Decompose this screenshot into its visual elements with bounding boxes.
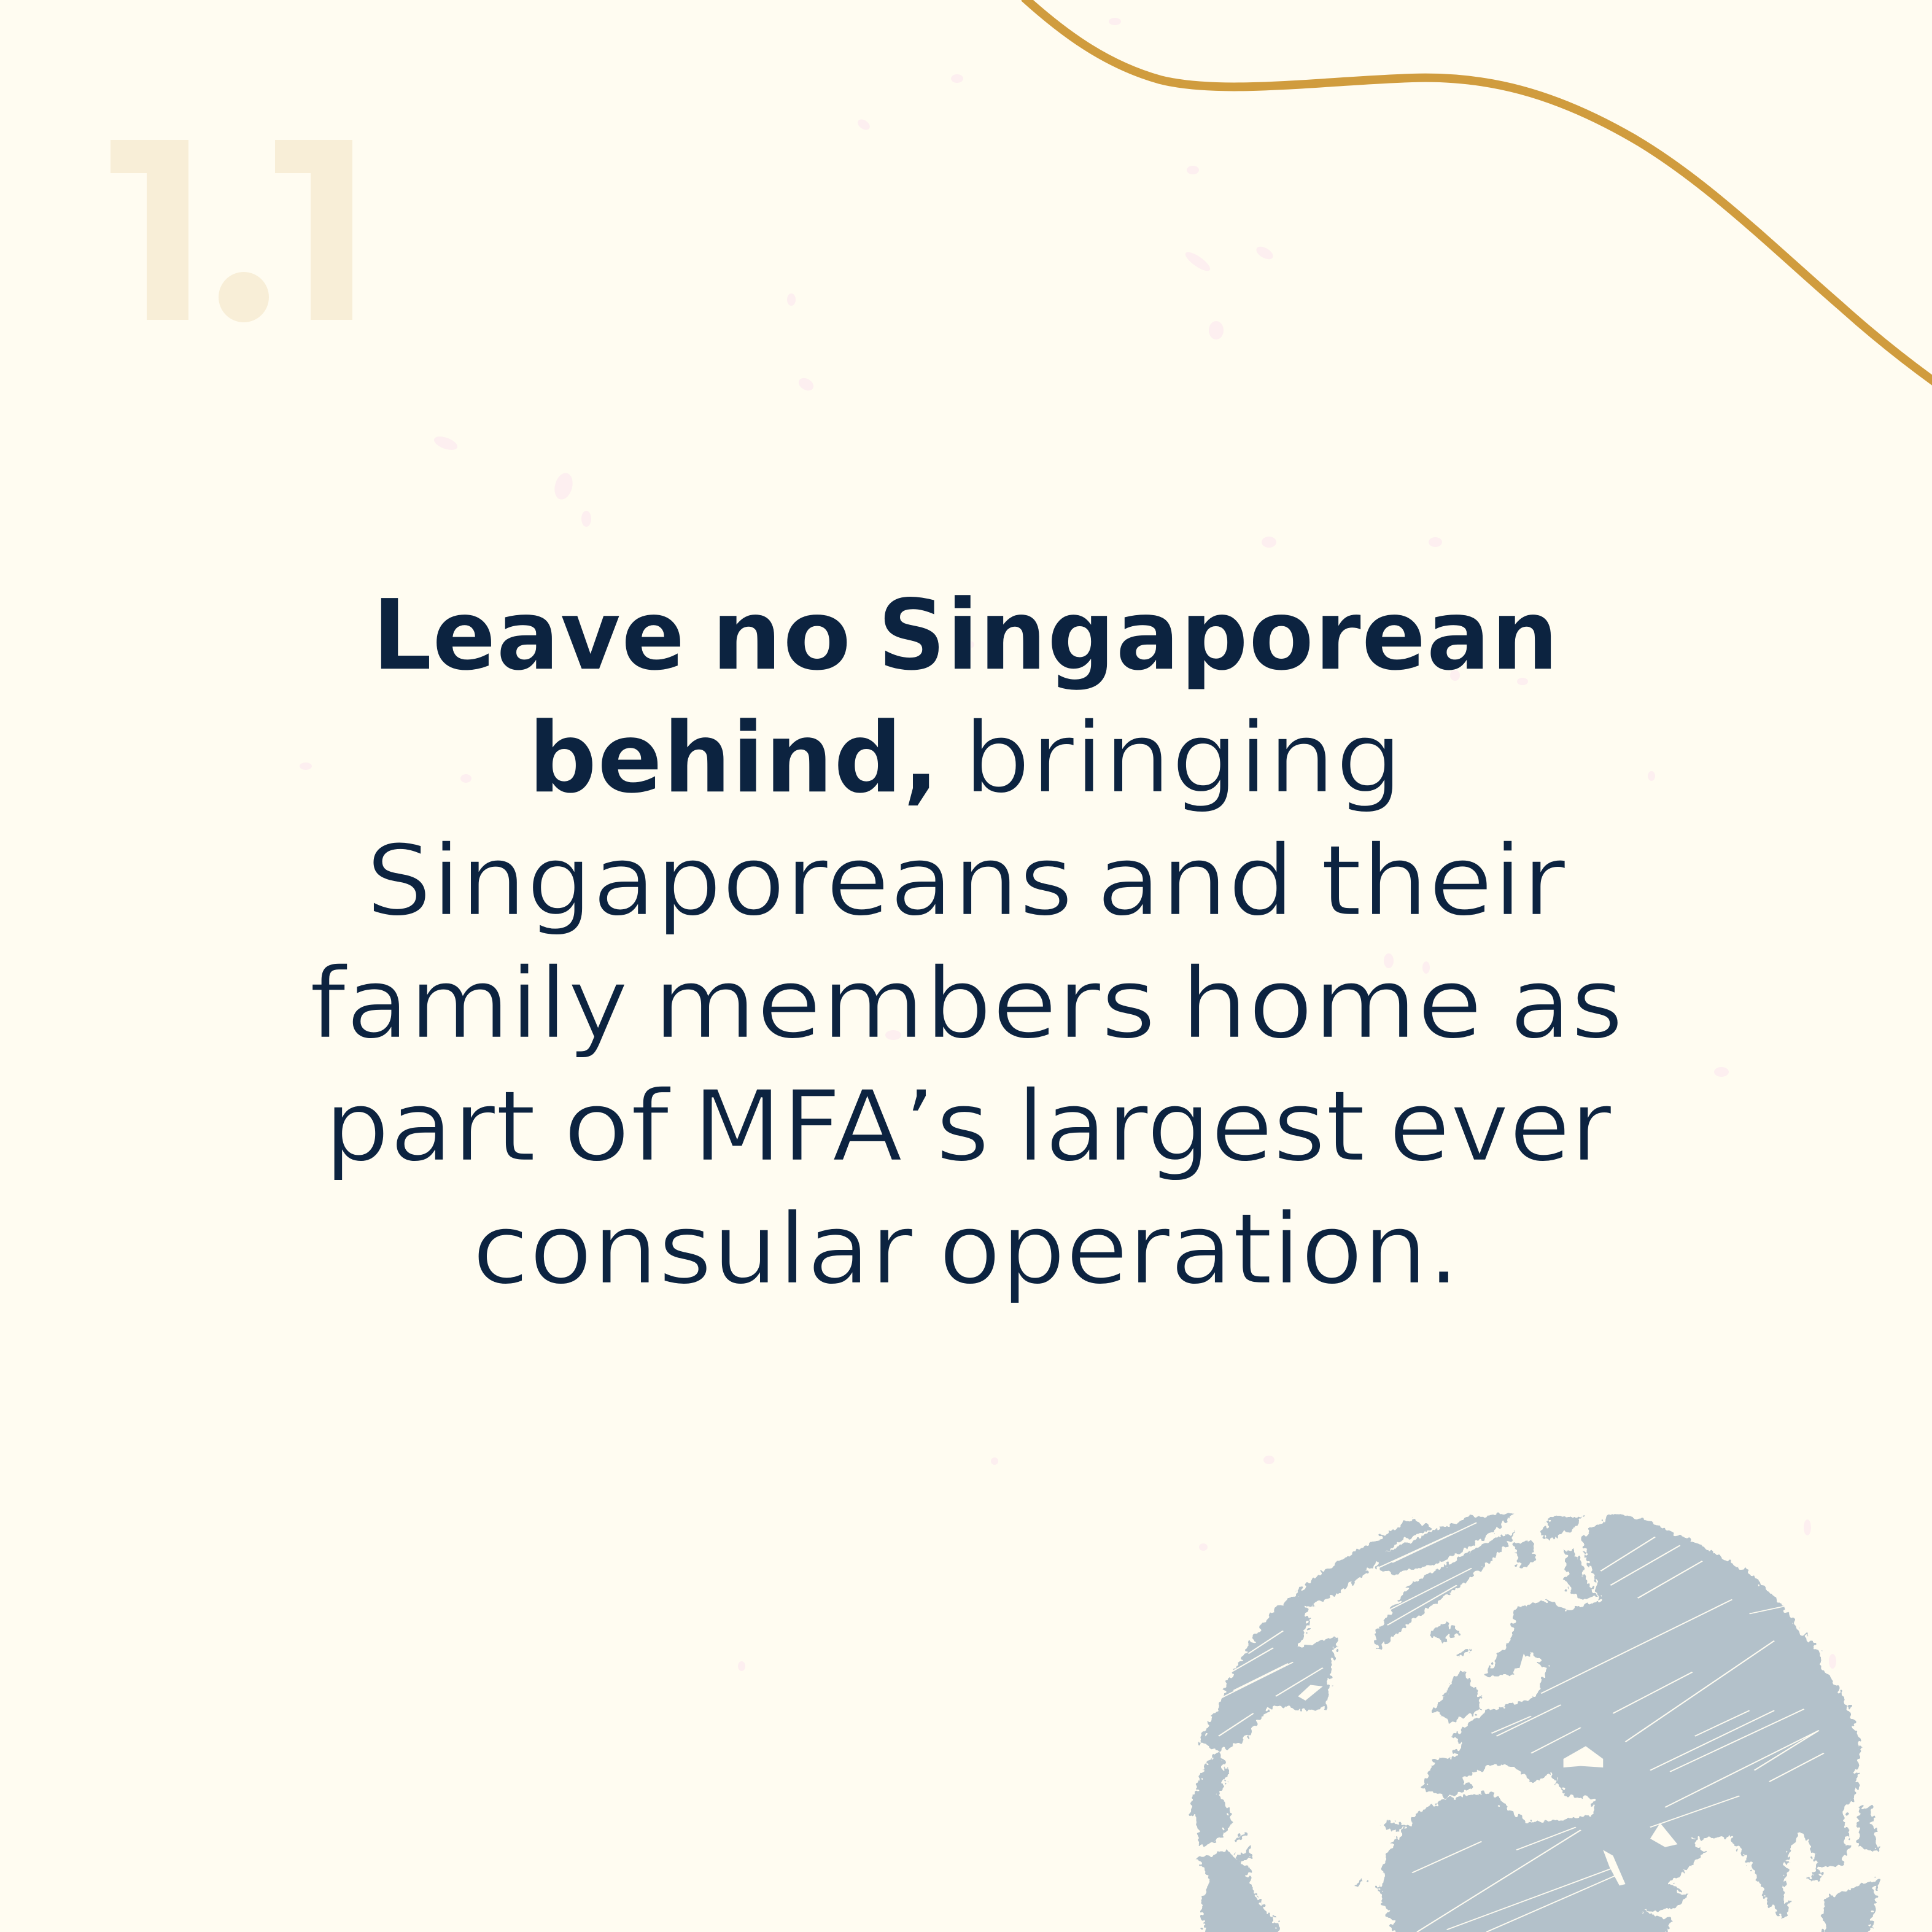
line 5: ever — [1389, 1069, 1612, 1184]
line 1 bold: Singaporean — [877, 578, 1559, 692]
line 1 bold — [372, 578, 1559, 692]
line 6: consular — [472, 1192, 913, 1306]
line 3 — [366, 823, 1565, 938]
line 2 mixed weight — [528, 700, 1403, 815]
line 5: largest — [1017, 1069, 1365, 1184]
main statement text — [309, 578, 1623, 1306]
line 1 bold: Leave — [372, 578, 685, 692]
line 6: operation. — [939, 1192, 1460, 1306]
line 5: MFA’s — [692, 1069, 990, 1184]
line 4: home — [1181, 946, 1483, 1061]
icon: scribbled globe — [1189, 1513, 1879, 1932]
decorative gold curve — [1024, 0, 1932, 382]
line 3: and — [1096, 823, 1295, 938]
line 4: members — [653, 946, 1156, 1061]
watermark number 1.1 — [111, 140, 352, 322]
line 3: their — [1321, 823, 1565, 938]
line 1 bold: no — [711, 578, 852, 692]
line 5: of — [563, 1069, 672, 1184]
line 2 mixed weight: behind, — [528, 700, 939, 815]
line 4: family — [309, 946, 629, 1061]
line 5 — [324, 1069, 1612, 1184]
line 6 — [472, 1192, 1460, 1306]
globe holes and highlights — [1298, 1654, 1677, 1885]
line 3: Singaporeans — [366, 823, 1073, 938]
line 2 mixed weight: bringing — [963, 700, 1403, 815]
line 4: as — [1510, 946, 1623, 1061]
line 5: part — [324, 1069, 536, 1184]
line 4 — [309, 946, 1623, 1061]
